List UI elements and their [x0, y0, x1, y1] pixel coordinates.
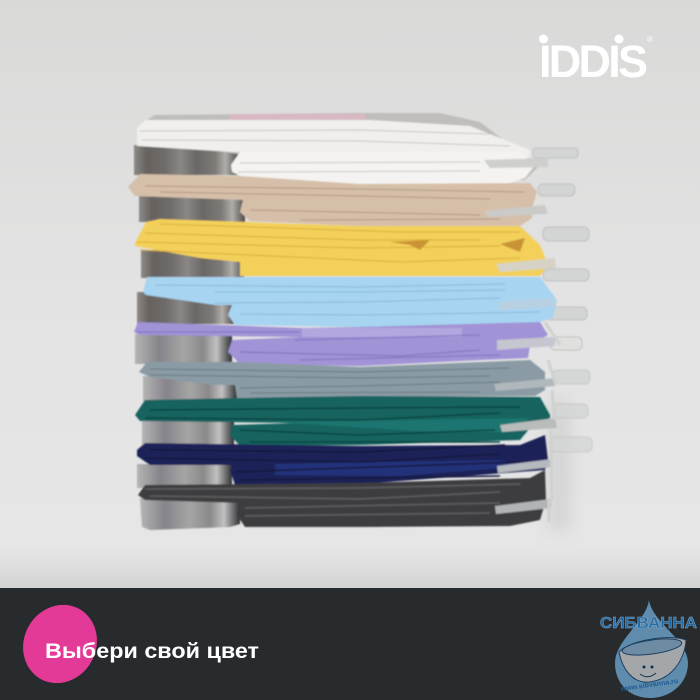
product stack: shower curtains	[128, 113, 592, 530]
clear packaging blocks, left side	[134, 145, 245, 530]
water drop	[615, 600, 688, 698]
curtain: yellow	[135, 219, 556, 276]
brand logo: iddis: ®	[647, 35, 653, 44]
curtain: grey	[139, 360, 555, 398]
curtain: light blue	[143, 277, 557, 327]
bathtub	[619, 636, 686, 682]
clear packaging edge, right	[545, 322, 560, 522]
brand logo: iddis: IDDIS	[539, 36, 648, 87]
partner logo: sibvanna	[600, 600, 697, 698]
banner text: Выбери свой цвет	[45, 639, 259, 663]
pull tabs, right side	[533, 148, 592, 452]
logo url: www.sibvanna.ru	[619, 678, 679, 693]
shadow beside stack	[548, 400, 570, 530]
curtain: white	[137, 113, 548, 186]
curtain: charcoal	[138, 470, 551, 527]
pink blob	[9, 592, 111, 696]
bottom banner	[0, 588, 700, 700]
curtain: purple	[134, 322, 555, 366]
curtain: teal green	[135, 396, 557, 446]
curtain: navy	[137, 435, 552, 485]
logo name: СИБВАННА	[600, 615, 697, 632]
curtain: beige	[128, 174, 548, 226]
